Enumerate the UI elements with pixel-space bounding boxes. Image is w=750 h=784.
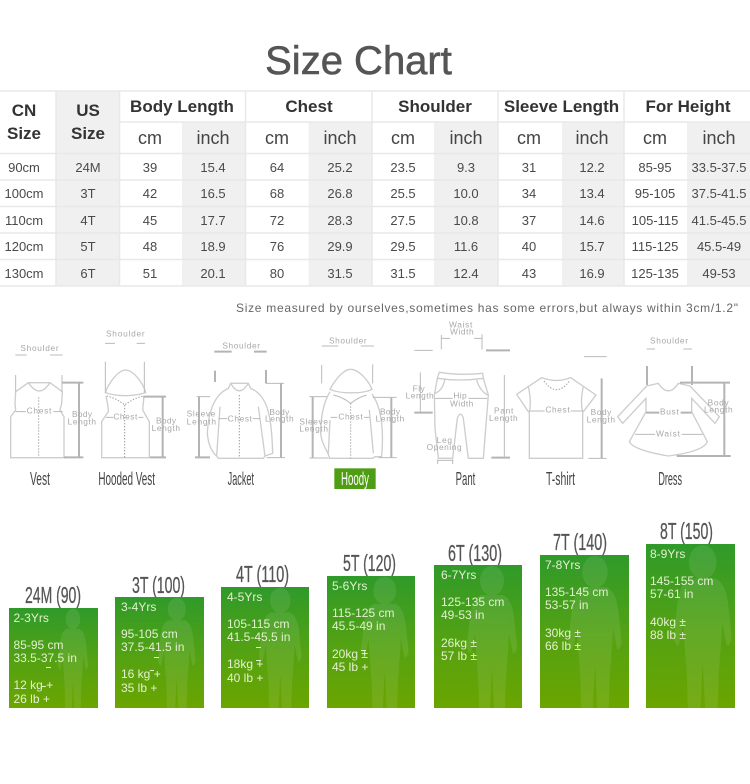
size card: 4T: 4T (110) xyxy=(236,561,289,587)
row 100cm xyxy=(4,186,746,201)
diagram: pant: Fly xyxy=(413,383,425,393)
row 90cm: 25.2 xyxy=(327,160,353,175)
row 100cm: 37.5-41.5 xyxy=(692,186,746,201)
row 120cm: 11.6 xyxy=(454,239,478,254)
diagram: hoody: Body xyxy=(380,407,401,417)
size card: 8T: 8T (150) xyxy=(660,518,713,544)
diagram: jacket: Shoulder xyxy=(222,340,261,350)
diagram: dress xyxy=(618,335,733,489)
row 130cm: 31.5 xyxy=(390,266,416,281)
diagram: hooded vest: Hooded Vest xyxy=(98,468,155,489)
size card: 7T: 135-145 cm xyxy=(545,585,608,599)
diagram: jacket: Chest xyxy=(228,414,253,424)
size card: 4T: 4-5Yrs xyxy=(227,590,262,604)
row 130cm: 130cm xyxy=(4,266,44,281)
row 110cm: 45 xyxy=(143,213,157,228)
row 110cm: 27.5 xyxy=(390,213,416,228)
diagram: hoody: Length xyxy=(299,424,329,434)
row 110cm: 110cm xyxy=(5,213,43,228)
size card: 5T xyxy=(327,550,415,708)
size card: 8T xyxy=(646,518,735,708)
row 130cm: 125-135 xyxy=(631,266,679,281)
size card: 8T: 8-9Yrs xyxy=(650,547,685,561)
size card: 6T: 6-7Yrs xyxy=(441,568,476,582)
table headers xyxy=(7,97,736,148)
size card: 5T: 115-125 cm xyxy=(332,606,394,620)
row 120cm: 15.7 xyxy=(579,239,605,254)
row 110cm: 37 xyxy=(522,213,536,228)
table headers: cm xyxy=(138,128,162,148)
diagram: dress: Dress xyxy=(658,468,682,489)
diagram: vest: Vest xyxy=(30,468,50,489)
size card: 5T: 45.5-49 in xyxy=(332,619,385,633)
row 100cm: 3T xyxy=(80,186,96,201)
row 90cm: 90cm xyxy=(8,160,40,175)
measurement note: Size measured by ourselves,sometimes has some errors,but always within 3cm/1.2" xyxy=(236,301,738,315)
size card: 8T: 145-155 cm xyxy=(650,574,713,588)
table headers: cm xyxy=(391,128,415,148)
diagram: dress: Length xyxy=(704,405,733,415)
size card: 3T: 37.5-41.5 in xyxy=(121,640,184,654)
table headers: cm xyxy=(517,128,541,148)
row 110cm: 28.3 xyxy=(327,213,353,228)
row 90cm: 33.5-37.5 xyxy=(692,160,746,175)
row 120cm xyxy=(4,239,741,254)
size card: 7T: 30kg ± xyxy=(545,626,581,640)
table headers: Size xyxy=(7,124,41,143)
row 110cm: 4T xyxy=(80,213,96,228)
table headers: Chest xyxy=(285,97,333,116)
size card: 3T: 16 kg + xyxy=(121,667,161,681)
hoody label: Hoody xyxy=(341,468,369,489)
row 90cm: 39 xyxy=(143,160,157,175)
size card: 7T: 7T (140) xyxy=(553,529,607,555)
row 120cm: 29.5 xyxy=(390,239,416,254)
size card: 6T: 49-53 in xyxy=(441,608,484,622)
table headers: Body Length xyxy=(130,97,234,116)
row 130cm: 80 xyxy=(270,266,284,281)
row 110cm: 17.7 xyxy=(200,213,226,228)
row 100cm: 100cm xyxy=(4,186,44,201)
row 90cm: 31 xyxy=(522,160,536,175)
row 120cm: 45.5-49 xyxy=(697,239,741,254)
row 110cm xyxy=(5,213,746,228)
table headers: Size xyxy=(71,124,105,143)
row 100cm: 13.4 xyxy=(579,186,605,201)
size card: 24M xyxy=(9,582,98,708)
size card: 7T: 53-57 in xyxy=(545,598,588,612)
size card: 4T xyxy=(221,561,309,708)
diagram: dress: Waist xyxy=(656,429,681,439)
table headers: inch xyxy=(323,128,357,148)
diagram: t-shirt: Length xyxy=(587,415,616,425)
size card: 4T: 41.5-45.5 in xyxy=(227,630,290,644)
row 130cm: 31.5 xyxy=(327,266,353,281)
size card: 5T: 5-6Yrs xyxy=(332,579,367,593)
diagram: jacket: Sleeve xyxy=(187,409,216,419)
size card: 8T: 57-61 in xyxy=(650,587,693,601)
diagram: hoody: Length xyxy=(376,414,405,424)
diagram: vest: Body xyxy=(72,409,93,419)
diagram: jacket: Length xyxy=(187,417,217,427)
row 100cm: 25.5 xyxy=(390,186,416,201)
row 120cm: 18.9 xyxy=(200,239,226,254)
diagram: vest: Shoulder xyxy=(20,343,59,353)
size card: 4T: 105-115 cm xyxy=(227,617,289,631)
row 130cm xyxy=(4,266,736,281)
table headers: For Height xyxy=(646,97,731,116)
size card: 24M: 12 kg + xyxy=(14,678,53,692)
size table xyxy=(0,91,750,286)
diagram: pant: Width xyxy=(450,327,474,337)
size card: 3T: 3-4Yrs xyxy=(121,600,156,614)
diagram: vest: Chest xyxy=(27,406,52,416)
diagram: pant: Length xyxy=(489,413,518,423)
row 100cm: 16.5 xyxy=(200,186,226,201)
size card: 6T xyxy=(434,540,522,708)
hoody label xyxy=(334,468,376,489)
diagram: hooded vest: Length xyxy=(152,423,181,433)
row 90cm xyxy=(8,160,746,175)
row 100cm: 26.8 xyxy=(327,186,353,201)
size card: 24M: 26 lb + xyxy=(14,692,50,706)
table headers: inch xyxy=(196,128,230,148)
table headers: Sleeve Length xyxy=(504,97,619,116)
size card: 24M: 85-95 cm xyxy=(14,638,64,652)
row 120cm: 76 xyxy=(270,239,284,254)
row 130cm: 43 xyxy=(522,266,536,281)
row 90cm: 64 xyxy=(270,160,284,175)
row 100cm: 42 xyxy=(143,186,157,201)
diagram: t-shirt: Body xyxy=(591,407,612,417)
row 130cm: 49-53 xyxy=(702,266,736,281)
garment diagrams: right group xyxy=(406,320,733,489)
row 120cm: 115-125 xyxy=(632,239,678,254)
size card: 5T: 5T (120) xyxy=(343,550,396,576)
table headers: inch xyxy=(575,128,609,148)
diagram: hoody: Sleeve xyxy=(299,416,329,426)
diagram: vest: Length xyxy=(68,417,97,427)
row 120cm: 120cm xyxy=(4,239,44,254)
size card: 3T: 35 lb + xyxy=(121,681,157,695)
diagram: pant: Waist xyxy=(449,320,473,330)
diagram: pant: Width xyxy=(450,398,474,408)
size card: 3T: 3T (100) xyxy=(132,572,185,598)
row 130cm: 6T xyxy=(80,266,96,281)
row 100cm: 95-105 xyxy=(635,186,675,201)
row 110cm: 14.6 xyxy=(579,213,605,228)
diagram: jacket xyxy=(187,340,294,489)
row 130cm: 16.9 xyxy=(579,266,605,281)
row 120cm: 48 xyxy=(143,239,157,254)
diagram: pant: Length xyxy=(406,391,434,401)
diagram: t-shirt: Chest xyxy=(545,405,570,415)
table headers: inch xyxy=(702,128,736,148)
row 90cm: 9.3 xyxy=(457,160,475,175)
diagram: hoody: Shoulder xyxy=(329,336,367,346)
diagram: pant: Pant xyxy=(494,406,514,416)
diagram: dress: Body xyxy=(708,398,729,408)
diagram: hooded vest: Chest xyxy=(113,412,138,422)
size card: 24M: 2-3Yrs xyxy=(14,611,49,625)
row 110cm: 105-115 xyxy=(632,213,678,228)
size card: 5T: 45 lb + xyxy=(332,660,368,674)
row 90cm: 12.2 xyxy=(579,160,605,175)
size card: 7T: 7-8Yrs xyxy=(545,558,580,572)
diagram: jacket: Jacket xyxy=(228,468,254,489)
row 100cm: 34 xyxy=(522,186,536,201)
diagram: pant: Leg xyxy=(437,435,453,445)
table headers: cm xyxy=(643,128,667,148)
table headers: US xyxy=(76,101,100,120)
size card: 3T: 95-105 cm xyxy=(121,627,178,641)
size card: 24M: 33.5-37.5 in xyxy=(14,651,77,665)
diagram: hooded vest xyxy=(98,329,181,489)
size card: 6T: 125-135 cm xyxy=(441,595,504,609)
table headers: inch xyxy=(449,128,483,148)
size card: 7T: 66 lb ± xyxy=(545,639,581,653)
size card: 6T: 57 lb ± xyxy=(441,649,477,663)
diagram: dress: Shoulder xyxy=(650,335,689,345)
size card: 6T: 6T (130) xyxy=(448,540,502,566)
diagram: dress: Bust xyxy=(660,407,679,417)
size card: 5T: 20kg ± xyxy=(332,647,368,661)
table headers: Shoulder xyxy=(398,97,472,116)
size card: 7T xyxy=(540,529,629,708)
size card: 3T xyxy=(115,572,204,708)
diagram: pant: Hip xyxy=(453,391,467,401)
row 130cm: 12.4 xyxy=(453,266,479,281)
diagram: jacket: Length xyxy=(265,414,294,424)
diagram: pant: Opening xyxy=(427,442,462,452)
diagram: t-shirt: T-shirt xyxy=(546,468,575,489)
row 110cm: 72 xyxy=(270,213,284,228)
row 120cm: 5T xyxy=(80,239,96,254)
row 90cm: 23.5 xyxy=(390,160,416,175)
title: Size Chart xyxy=(265,39,452,83)
size card: 8T: 40kg ± xyxy=(650,615,686,629)
row 110cm: 41.5-45.5 xyxy=(692,213,746,228)
table headers: CN xyxy=(12,101,36,120)
table headers: cm xyxy=(265,128,289,148)
row 110cm: 10.8 xyxy=(453,213,479,228)
diagram: vest xyxy=(11,343,97,489)
row 130cm: 20.1 xyxy=(200,266,226,281)
diagram: t-shirt xyxy=(517,357,616,489)
size card: 4T: 40 lb + xyxy=(227,671,263,685)
row 100cm: 10.0 xyxy=(453,186,479,201)
row 120cm: 29.9 xyxy=(327,239,353,254)
size card: 8T: 88 lb ± xyxy=(650,628,686,642)
diagram: hooded vest: Shoulder xyxy=(106,329,145,339)
diagram: pant xyxy=(406,320,518,489)
size card: 24M: 24M (90) xyxy=(25,582,81,608)
diagram: hoody: Chest xyxy=(338,412,363,422)
row 120cm: 40 xyxy=(522,239,536,254)
row 90cm: 85-95 xyxy=(638,160,672,175)
diagram: hooded vest: Body xyxy=(156,416,177,426)
diagram: jacket: Body xyxy=(269,407,290,417)
size card: 6T: 26kg ± xyxy=(441,636,477,650)
garment diagrams: left group xyxy=(11,329,405,489)
row 130cm: 51 xyxy=(143,266,157,281)
row 100cm: 68 xyxy=(270,186,284,201)
row 90cm: 24M xyxy=(75,160,101,175)
diagram: pant: Pant xyxy=(456,468,476,489)
size card: 4T: 18kg + xyxy=(227,657,263,671)
row 90cm: 15.4 xyxy=(200,160,226,175)
diagram: hoody xyxy=(299,336,405,489)
